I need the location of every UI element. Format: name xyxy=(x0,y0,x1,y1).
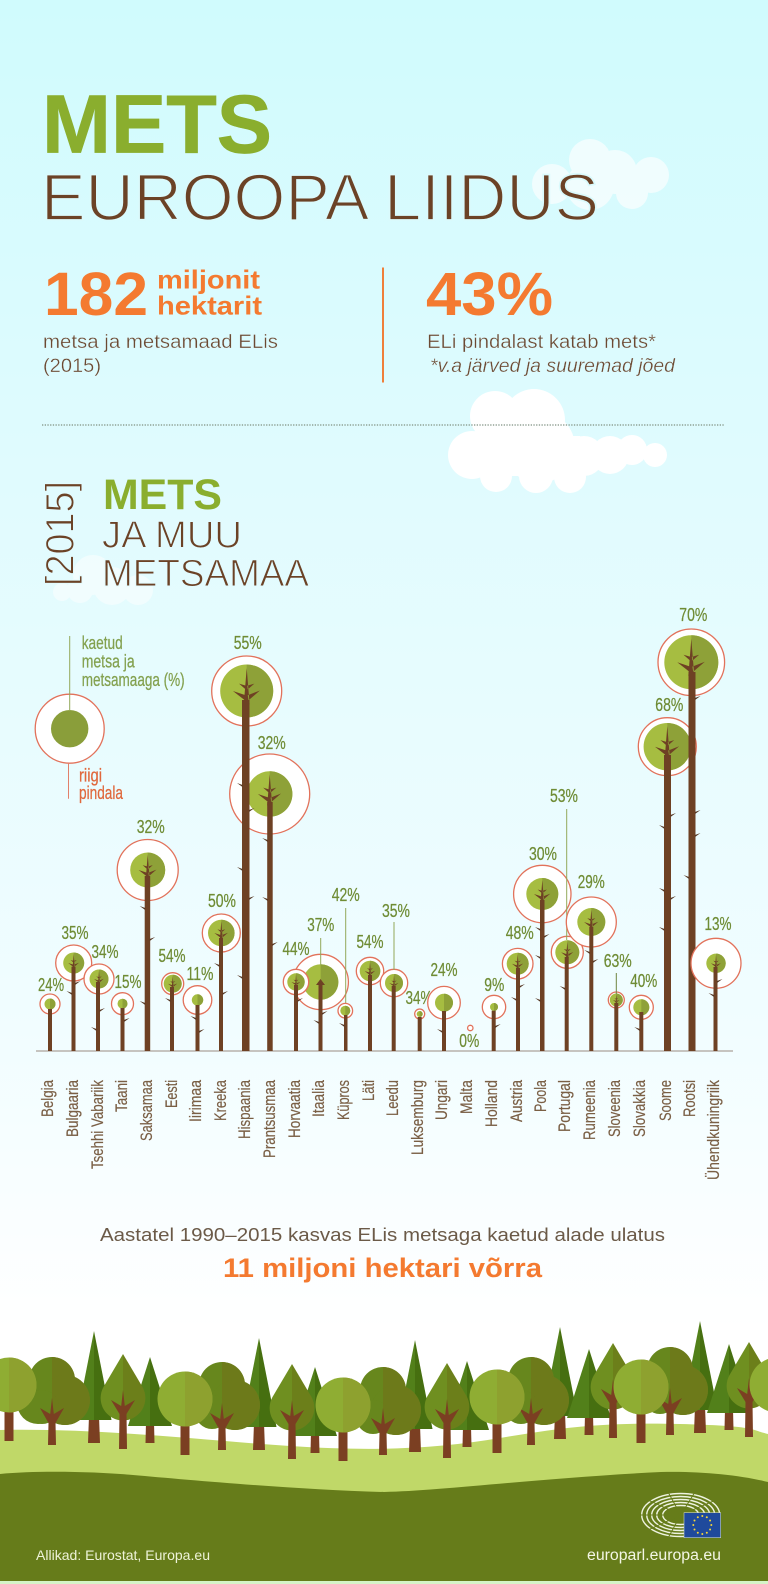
stat: 43 percent: *v.a järved ja suuremad jõed xyxy=(430,356,676,377)
country labels: Horvaatia xyxy=(285,1080,304,1138)
tree: Taani xyxy=(112,971,142,1051)
section heading: JA MUU xyxy=(102,514,242,556)
country labels: Iirimaa xyxy=(186,1080,205,1122)
tree: Ühendkuningriik: 13% xyxy=(704,913,732,934)
country labels: Tsehhi Vabariik xyxy=(88,1080,107,1169)
country labels: Ungari xyxy=(432,1080,451,1120)
tree: Küpros: 42% xyxy=(332,884,360,905)
tree: Portugal xyxy=(550,785,583,1051)
tree: Prantsusmaa xyxy=(230,732,310,1051)
country labels: Malta xyxy=(457,1080,476,1114)
tree: Malta xyxy=(459,1025,479,1051)
country labels: Rootsi xyxy=(680,1080,699,1117)
stat: 182 million hectares: (2015) xyxy=(43,356,101,377)
tree: Horvaatia: 44% xyxy=(282,938,310,959)
country labels: Portugal xyxy=(555,1080,574,1132)
dark green ground xyxy=(0,1472,768,1581)
country labels: Poola xyxy=(531,1080,550,1112)
title: METS: METS xyxy=(42,78,272,170)
country labels: Küpros xyxy=(334,1080,353,1120)
year label: [2015] xyxy=(38,481,82,586)
stat: 43 percent: ELi pindalast katab mets* xyxy=(427,332,657,353)
legend: metsamaaga (%) xyxy=(82,669,185,690)
tree: Bulgaaria: 35% xyxy=(62,922,88,943)
sources: Allikad: Eurostat, Europa.eu xyxy=(36,1547,210,1563)
country labels: Itaalia xyxy=(309,1080,328,1117)
tree: Ungari: 24% xyxy=(430,959,458,980)
cloud: top right xyxy=(532,139,669,210)
country labels: Rumeenia xyxy=(580,1080,599,1140)
tree: Hispaania xyxy=(212,632,282,1051)
tree: Slovakkia xyxy=(629,970,657,1051)
tree: Ühendkuningriik xyxy=(691,913,741,1051)
tree: Leedu xyxy=(380,900,410,1051)
forest xyxy=(0,1321,768,1461)
title: Euroopa Liidus: EUROOPA LIIDUS xyxy=(41,160,599,234)
logo: European Parliament xyxy=(641,1492,721,1538)
tree: Saksamaa xyxy=(117,816,178,1051)
country labels: Sloveenia xyxy=(605,1080,624,1137)
country labels: Ühendkuningriik xyxy=(704,1080,723,1180)
tree: Iirimaa xyxy=(183,963,214,1051)
section heading: METS xyxy=(103,471,222,519)
legend xyxy=(35,632,185,803)
country labels: Kreeka xyxy=(211,1080,230,1121)
tree: Prantsusmaa: 32% xyxy=(258,732,286,753)
legend: pindala xyxy=(79,782,124,803)
section heading xyxy=(102,471,310,595)
tree: Austria xyxy=(502,922,534,1051)
country labels: Bulgaaria xyxy=(63,1080,82,1137)
tree: Belgia xyxy=(38,974,64,1051)
country labels: Soome xyxy=(656,1080,675,1121)
tree: Eesti: 54% xyxy=(158,945,186,966)
tree: Itaalia: 37% xyxy=(307,914,334,935)
tree: Taani: 15% xyxy=(114,971,142,992)
website: europarl.europa.eu xyxy=(587,1547,721,1564)
country labels: Leedu xyxy=(383,1080,402,1116)
country labels: Slovakkia xyxy=(630,1080,649,1137)
tree: Rootsi: 70% xyxy=(679,604,707,625)
growth figure: 11 miljoni hektari võrra xyxy=(223,1253,543,1283)
tree: Slovakkia: 40% xyxy=(630,970,657,991)
legend: riigi xyxy=(79,765,102,786)
country labels: Prantsusmaa xyxy=(260,1080,279,1158)
tree: Horvaatia xyxy=(282,938,310,1051)
tree: Soome: 68% xyxy=(655,694,683,715)
stat: 182 million hectares: miljonit xyxy=(157,264,260,294)
tree: Holland xyxy=(482,974,506,1051)
tree: Luksemburg xyxy=(406,987,432,1051)
tree: Portugal: 53% xyxy=(550,785,578,806)
tree: Luksemburg: 34% xyxy=(406,987,432,1008)
section heading: METSAMAA xyxy=(102,553,310,595)
country labels: Belgia xyxy=(38,1080,57,1117)
tree: Rumeenia xyxy=(566,871,616,1051)
tree: Sloveenia xyxy=(604,950,632,1051)
country labels xyxy=(38,1080,723,1180)
tree: Läti xyxy=(356,931,384,1051)
country labels: Austria xyxy=(507,1080,526,1122)
legend: metsa ja xyxy=(82,651,135,672)
tree: Poola: 30% xyxy=(529,843,557,864)
country labels: Saksamaa xyxy=(137,1080,156,1141)
stat: 182 million hectares: metsa ja metsamaad ELis xyxy=(43,332,278,353)
tree: Soome xyxy=(638,694,696,1051)
tree: Ungari xyxy=(428,959,460,1051)
tree: Poola xyxy=(514,843,571,1051)
tree: Hispaania: 55% xyxy=(234,632,262,653)
country labels: Läti xyxy=(359,1080,378,1101)
divider xyxy=(382,268,384,382)
tree: Tsehhi Vabariik xyxy=(84,941,118,1051)
tree: Rootsi xyxy=(658,604,725,1051)
tree: Rumeenia: 29% xyxy=(578,871,605,892)
stat: 182 million hectares xyxy=(43,260,278,377)
tree: Malta: 0% xyxy=(459,1030,479,1051)
tree: Tsehhi Vabariik: 34% xyxy=(92,941,118,962)
country labels: Hispaania xyxy=(235,1080,254,1139)
tree: Eesti xyxy=(158,945,186,1051)
cloud: left xyxy=(53,555,153,605)
stat: 182 million hectares: 182 xyxy=(44,260,148,328)
tree: Holland: 9% xyxy=(484,974,504,995)
tree: Sloveenia: 63% xyxy=(604,950,632,971)
stat: 43 percent: 43% xyxy=(426,260,553,328)
tree: Läti: 54% xyxy=(356,931,384,952)
tree: Iirimaa: 11% xyxy=(186,963,214,984)
stat: 182 million hectares: hektarit xyxy=(157,290,262,320)
tree: Saksamaa: 32% xyxy=(137,816,165,837)
country labels: Holland xyxy=(482,1080,501,1127)
light green hill xyxy=(0,1424,768,1500)
stat: 43 percent xyxy=(426,260,676,377)
tree: Leedu: 35% xyxy=(382,900,410,921)
tree: Austria: 48% xyxy=(506,922,534,943)
country labels: Eesti xyxy=(162,1080,181,1108)
country labels: Taani xyxy=(112,1080,131,1112)
country labels: Luksemburg xyxy=(408,1080,427,1155)
legend: kaetud xyxy=(82,632,123,653)
tree: Kreeka: 50% xyxy=(208,890,236,911)
growth sentence: Aastatel 1990–2015 kasvas ELis metsaga kaetud alade ulatus xyxy=(100,1225,665,1245)
tree: Bulgaaria xyxy=(56,922,92,1051)
tree: Itaalia xyxy=(293,914,348,1051)
tree: Küpros xyxy=(332,884,360,1051)
cloud: middle right xyxy=(448,389,667,493)
tree: Belgia: 24% xyxy=(38,974,64,995)
tree: Kreeka xyxy=(202,890,240,1051)
